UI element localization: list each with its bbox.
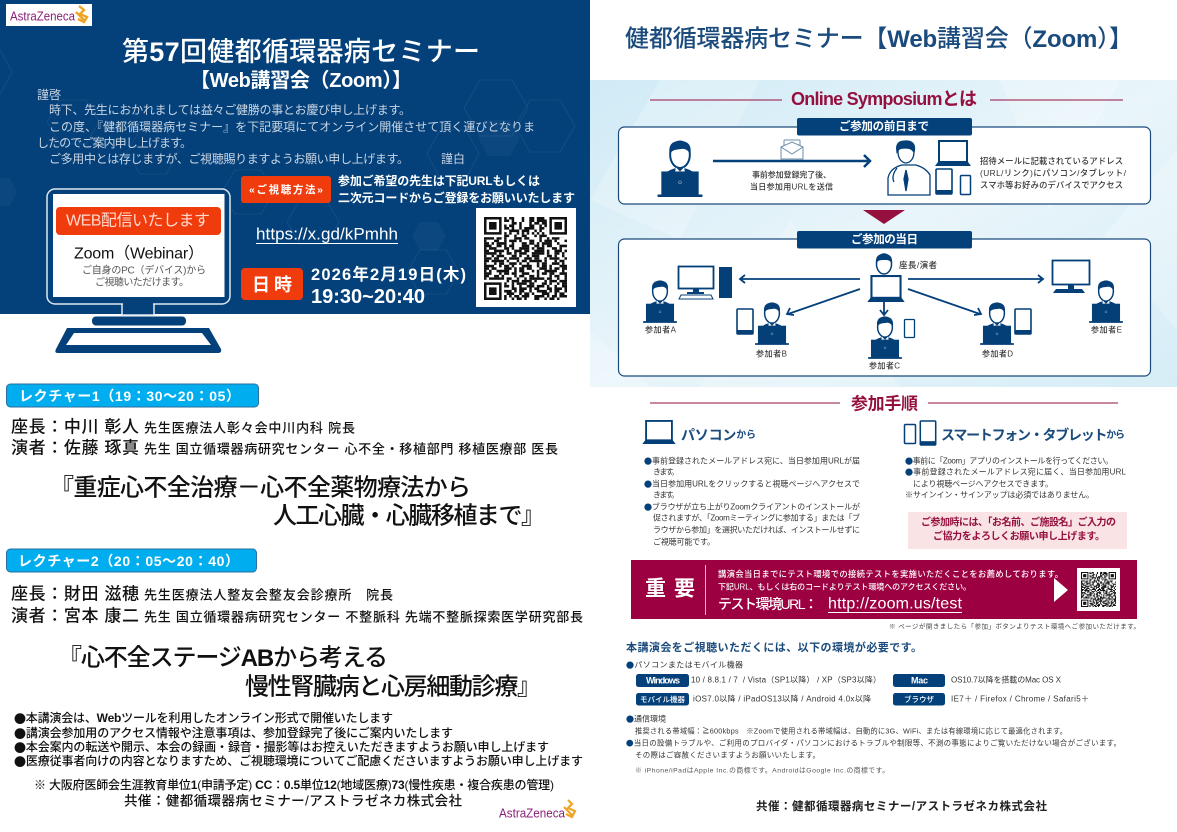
- lecture 1 speaker: [11, 438, 558, 458]
- lecture 2 title: 『心不全ステージABから考える: [58, 644, 388, 672]
- subtitle: 【Web講習会（Zoom）】: [190, 69, 412, 92]
- date and time: 2026年2月19日(木): [311, 264, 466, 284]
- greeting text: ご多用中とは存じますが、ご視聴賜りますようお願い申し上げます。: [49, 151, 409, 166]
- badge: browser: ブラウザ: [904, 694, 934, 704]
- network: 推奨される帯域幅：≧600kbps ※Zoomで使用される帯域幅は、自動的に3G、WiFi、または有線環境に応じて最適化されます。: [635, 726, 1067, 736]
- badge: Mac: [893, 674, 945, 687]
- PC steps: ご視聴可能です。: [653, 536, 715, 546]
- lecture 1 label: [6, 384, 258, 407]
- logo: AstraZeneca header: AstraZeneca: [10, 8, 76, 24]
- trouble note: [626, 738, 1121, 760]
- badge: browser: [893, 693, 945, 706]
- monitor label: WEB配信いたします: [66, 212, 210, 230]
- PC steps: [644, 456, 860, 546]
- date label: [241, 268, 303, 300]
- arrow: send: [713, 155, 870, 167]
- monitor text: ご視聴いただけます。: [95, 276, 189, 288]
- PC steps: きます。: [653, 468, 679, 476]
- PC steps: ●ブラウザが立ち上がりZoomクライアントのインストールが: [644, 502, 860, 512]
- lecture 2 label: [6, 549, 256, 572]
- participant B: 参加者B: [756, 348, 787, 358]
- trouble note: ●当日の設備トラブルや、ご利用のプロバイダ・パソコンにおけるトラブルや制限等、不測の事態によりご覧いただけない場合がございます。: [626, 738, 1121, 748]
- send caption: 事前参加登録完了後、: [752, 170, 831, 180]
- greeting text: この度、『健都循環器病セミナー』を下記要項にてオンライン開催させて頂く運びとなりま: [49, 120, 535, 134]
- section: from PC: [642, 421, 860, 546]
- panel: online symposium: [590, 80, 1177, 387]
- notes: ●本会案内の転送や開示、本会の録画・録音・撮影等はお控えいただきますようお願い申し上げます: [14, 738, 549, 756]
- heading: steps: 参加手順: [851, 394, 918, 414]
- lecture 2 chair: [11, 584, 393, 604]
- participant C: [868, 317, 914, 370]
- right title: 健都循環器病セミナー【Web講習会（Zoom）】: [625, 26, 1133, 52]
- monitor text: Zoom（Webinar）: [74, 244, 204, 262]
- notes: ●講演会参加用のアクセス情報や注意事項は、参加登録完了後にご案内いたします: [14, 724, 453, 742]
- PC steps: ラウザから参加」を選択いただければ、インストールせずに: [653, 524, 860, 534]
- participant D: [980, 303, 1031, 358]
- lecture 2 speaker: 演者：宮本 康二: [11, 606, 139, 626]
- smartphone steps: により視聴ページへアクセスできます。: [913, 478, 1053, 488]
- network: ●通信環境: [626, 714, 666, 724]
- lecture 1 title: 人工心臓・心臓移植まで』: [273, 502, 545, 530]
- how to watch text: 参加ご希望の先生は下記URLもしくは: [338, 173, 540, 188]
- arrow: to QR: [1054, 578, 1068, 602]
- greeting text: 謹白: [441, 151, 465, 166]
- notes: ●本講演会は、Webツールを利用したオンライン形式で開催いたします: [14, 710, 393, 726]
- how to watch label: «ご視聴方法»: [249, 183, 323, 196]
- send caption: 当日参加用URLを送信: [750, 182, 833, 192]
- date and time: 19:30~20:40: [311, 286, 425, 308]
- how to watch text: 二次元コードからご登録をお願いいたします: [338, 190, 575, 205]
- trouble note: その際はご容赦くださいますようお願いいたします。: [635, 750, 820, 760]
- tab: before the day: [797, 118, 972, 136]
- banner text: 下記URL、もしくは右のコードよりテスト環境へのアクセスください。: [718, 582, 971, 592]
- logo: AstraZeneca footer: AstraZeneca: [499, 806, 566, 820]
- date and time: [311, 264, 466, 308]
- requirements: [626, 660, 1121, 774]
- panel: on the day: [618, 231, 1150, 376]
- badge: Windows: Windows: [646, 676, 680, 686]
- tab: before the day: ご参加の前日まで: [839, 119, 929, 133]
- participant E: 参加者E: [1091, 324, 1122, 334]
- Windows versions: 10 / 8.8.1 / 7 / Vista（SP1以降） / XP（SP3以降）: [691, 674, 881, 684]
- panel: seminar header: [0, 0, 590, 314]
- banner text: http://zoom.us/test: [828, 596, 963, 612]
- smartphone steps: [905, 456, 1127, 500]
- banner: important: [631, 560, 1137, 619]
- icon: mail: [781, 140, 803, 159]
- greeting text: 時下、先生におかれましては益々ご健勝の事とお慶び申し上げます。: [49, 102, 411, 117]
- credits: ※ 大阪府医師会生涯教育単位1(申請予定) CC：0.5単位12(地域医療)73(慢性疾患・複合疾患の管理): [34, 777, 554, 792]
- QR code: [476, 208, 576, 307]
- PC steps: きます。: [653, 490, 679, 500]
- icon: presenter: [867, 254, 905, 302]
- heading: online symposium: Online Symposiumとは: [791, 89, 977, 109]
- PC steps: 促されますが、「Zoomミーティングに参加する」または「ブ: [653, 512, 860, 522]
- callout: name entry: [908, 512, 1127, 549]
- lecture 2 chair: 先生医療法人整友会整友会診療所 院長: [144, 588, 393, 602]
- participant B: [737, 303, 789, 358]
- lecture 1 chair: [11, 418, 355, 436]
- lecture 2 label: レクチャー2（20：05～20：40）: [18, 553, 239, 569]
- participant A: 参加者A: [645, 324, 677, 334]
- section: from smartphone and tablet: [904, 421, 1127, 549]
- date label: 日時: [252, 275, 292, 295]
- greeting text: 謹啓: [37, 87, 61, 102]
- greeting text: したのでご案内申し上げます。: [37, 135, 192, 150]
- Mac versions: OS10.7以降を搭載のMac OS X: [951, 674, 1062, 684]
- lecture 1 chair: 座長：中川 彰人: [11, 418, 139, 436]
- monitor label: [56, 207, 221, 235]
- presenter label: 座長/演者: [899, 260, 937, 270]
- how to watch text: [338, 173, 575, 205]
- access text: (URL/リンク)にパソコン/タブレット/: [980, 168, 1127, 178]
- notes: ●医療従事者向けの内容となりますため、ご視聴環境についてご配慮くださいますようお願い申し上げます: [14, 752, 583, 770]
- icon: laptop: [642, 421, 676, 444]
- access text: [980, 156, 1127, 190]
- lecture 2: [6, 549, 583, 700]
- sponsor: 共催：健都循環器病セミナー/アストラゼネカ株式会社: [124, 794, 462, 808]
- PC steps: ●当日参加用URLをクリックすると視聴ページへアクセスで: [644, 478, 860, 490]
- lecture 2 title: 慢性腎臓病と心房細動診療』: [245, 674, 541, 700]
- access text: スマホ等お好みのデバイスでアクセス: [980, 180, 1123, 190]
- badge: mobile: モバイル機器: [640, 694, 686, 704]
- banner text: [718, 569, 1063, 612]
- badge: Mac: Mac: [911, 676, 928, 686]
- banner note: ※ ページが開きましたら「参加」ボタンよりテスト環境へご参加いただけます。: [889, 622, 1140, 630]
- lecture 1: [6, 384, 558, 530]
- how to watch label: [241, 176, 331, 203]
- arrow: down: [863, 210, 905, 224]
- send caption: [750, 170, 833, 192]
- right sponsor: 共催：健都循環器病セミナー/アストラゼネカ株式会社: [756, 799, 1048, 813]
- logo: AstraZeneca header: [6, 4, 92, 26]
- lecture 1 title: [50, 474, 545, 530]
- greeting text: [37, 87, 535, 166]
- smartphone steps: ●事前登録されたメールアドレス宛に届く、当日参加用URL: [905, 466, 1127, 478]
- device heading: ●パソコンまたはモバイル機器: [626, 660, 743, 670]
- banner label: 重要: [645, 578, 695, 600]
- lecture 1 label: レクチャー1（19：30～20：05）: [19, 388, 240, 404]
- icon: devices: [935, 141, 971, 194]
- icon: participant: [657, 141, 703, 197]
- participant E: [1052, 260, 1123, 334]
- lecture 1 chair: 先生医療法人彰々会中川内科 院長: [144, 420, 355, 436]
- lecture 2 speaker: 先生 国立循環器病研究センター 不整脈科 先端不整脈探索医学研究部長: [144, 610, 583, 624]
- tab: on the day: ご参加の当日: [851, 232, 918, 246]
- lecture 2 speaker: [11, 606, 583, 626]
- panel: before the day: [618, 118, 1150, 204]
- lecture 2 chair: 座長：財田 滋穂: [11, 584, 139, 604]
- URL: https://x.gd/kPmhh: [256, 224, 398, 244]
- title: 第57回健都循環器病セミナー: [122, 37, 480, 67]
- notes: [14, 710, 583, 770]
- participant C: 参加者C: [869, 360, 900, 370]
- icon: doctor: [888, 141, 930, 195]
- banner text: 講演会当日までにテスト環境での接続テストを実施いただくことをお薦めしております。: [718, 569, 1063, 579]
- PC steps: ●事前登録されたメールアドレス宛に、当日参加用URLが届: [644, 456, 860, 466]
- heading: requirements: 本講演会をご視聴いただくには、以下の環境が必要です。: [626, 640, 922, 654]
- lecture 2 title: [58, 644, 541, 700]
- icon: phone and tablet: [904, 421, 936, 445]
- banner text: テスト環境URL：: [718, 596, 818, 612]
- badge: Windows: [636, 674, 689, 687]
- monitor text: [74, 244, 206, 288]
- smartphone steps: ※サインイン・サインアップは必須ではありません。: [905, 490, 1094, 500]
- heading: from PC: パソコンから: [681, 427, 756, 443]
- browser versions: IE7＋ / Firefox / Chrome / Safari5＋: [951, 694, 1089, 704]
- access text: 招待メールに記載されているアドレス: [980, 156, 1123, 166]
- network: [626, 714, 1067, 736]
- participant A: [643, 266, 732, 334]
- heading: from smartphone: スマートフォン・タブレットから: [941, 427, 1125, 443]
- badge: mobile: [636, 693, 689, 706]
- tab: on the day: [797, 231, 972, 248]
- QR code: test: [1077, 568, 1120, 611]
- participant D: 参加者D: [982, 348, 1013, 358]
- trademark note: ※ iPhone/iPadはApple Inc.の商標です。AndroidはGoogle Inc.の商標です。: [635, 766, 889, 774]
- arrows: distribution: [740, 275, 1043, 315]
- lecture 1 title: 『重症心不全治療－心不全薬物療法から: [50, 474, 471, 502]
- smartphone steps: ●事前に「Zoom」アプリのインストールを行ってください。: [905, 456, 1113, 466]
- icon: monitor: [47, 189, 230, 353]
- callout: name entry: ご参加時には、「お名前、ご施設名」ご入力の: [921, 516, 1116, 528]
- lecture 1 speaker: 先生 国立循環器病研究センター 心不全・移植部門 移植医療部 医長: [144, 442, 558, 456]
- lecture 1 speaker: 演者：佐藤 琢真: [11, 438, 139, 458]
- mobile versions: iOS7.0以降 / iPadOS13以降 / Android 4.0x以降: [693, 694, 871, 704]
- monitor text: ご自身のPC（デバイス)から: [82, 264, 206, 276]
- callout: name entry: ご協力をよろしくお願い申し上げます。: [933, 530, 1105, 542]
